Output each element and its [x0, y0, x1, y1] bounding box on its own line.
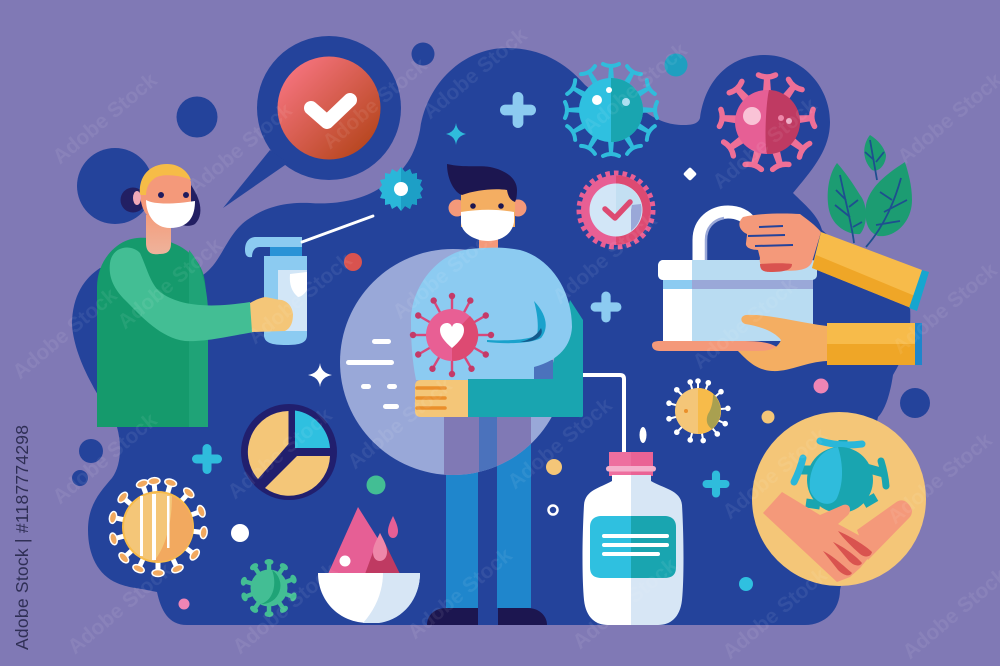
man with mask	[427, 164, 547, 625]
light blue plus	[591, 292, 621, 322]
watermarks: Adobe Stock	[403, 544, 517, 644]
decorative dot	[72, 470, 88, 486]
white diamond	[683, 167, 697, 181]
watermarks: Adobe Stock	[888, 259, 1000, 359]
decorative dot yellow	[762, 410, 774, 424]
small teal sparkle	[446, 123, 466, 145]
small yellow virus	[666, 378, 731, 444]
watermarks: Adobe Stock	[8, 284, 122, 384]
decorative ring dot	[548, 506, 558, 514]
teal gear virus	[379, 167, 423, 211]
watermarks: Adobe Stock	[708, 94, 822, 194]
shackle shade	[706, 218, 724, 260]
bowl with flames	[318, 507, 420, 623]
padlock box	[658, 260, 817, 341]
droplet	[640, 427, 646, 443]
white sparkle	[308, 363, 332, 387]
upper hand and sleeve	[739, 213, 929, 311]
decorative dot	[176, 96, 218, 138]
spray bottle	[245, 216, 373, 345]
pink virus	[719, 75, 815, 169]
watermarks: Adobe Stock	[388, 224, 502, 324]
padlock shackle	[699, 212, 750, 262]
watermarks: Adobe Stock	[548, 209, 662, 309]
watermarks: Adobe Stock	[688, 274, 802, 374]
large yellow virus	[108, 477, 208, 576]
watermarks: Adobe Stock	[318, 54, 432, 154]
decorative dot pink	[814, 378, 828, 394]
decorative dot	[900, 388, 930, 418]
watermarks: Adobe Stock	[718, 564, 832, 664]
blob: lobe left of woman	[77, 148, 153, 224]
decorative dot yellow	[546, 459, 562, 475]
decorative dot white	[231, 524, 249, 542]
watermarks: Adobe Stock	[223, 404, 337, 504]
yellow circle with virus and hand	[752, 412, 926, 586]
watermarks: Adobe Stock	[228, 559, 342, 659]
blue blob backdrop	[72, 48, 910, 625]
watermarks: Adobe Stock	[503, 394, 617, 494]
pie chart	[241, 404, 337, 500]
man's arm and hand	[415, 379, 583, 417]
legs through circle	[444, 417, 531, 477]
watermarks: Adobe Stock	[243, 249, 357, 349]
speech bubble with check mark	[223, 36, 401, 208]
green virus	[240, 559, 298, 617]
decorative dot pink	[178, 598, 190, 610]
light blue plus	[500, 92, 536, 128]
motion lines	[346, 339, 399, 409]
decorative dot green	[366, 476, 386, 494]
medicine bottle	[582, 452, 684, 625]
watermarks: Adobe Stock	[568, 554, 682, 654]
woman with mask	[97, 164, 254, 427]
watermarks: Adobe Stock	[183, 99, 297, 199]
decorative dot teal	[739, 577, 753, 591]
tube	[583, 375, 624, 452]
decorative dot teal	[664, 54, 688, 76]
decorative red dot	[344, 253, 362, 271]
woman's hand	[250, 297, 293, 332]
teal virus	[565, 64, 657, 156]
translucent circle	[340, 249, 566, 475]
watermarks: Adobe Stock	[48, 69, 162, 169]
watermarks: Adobe Stock	[718, 424, 832, 524]
watermarks: Adobe Stock	[883, 429, 997, 529]
teal plus	[192, 444, 222, 474]
decorative dot	[412, 42, 434, 66]
heart virus on chest	[410, 293, 494, 377]
teal plus	[702, 470, 730, 498]
watermarks: Adobe Stock	[578, 39, 692, 139]
watermarks: Adobe Stock	[63, 559, 177, 659]
gear badge with check	[579, 173, 653, 247]
watermarks: Adobe Stock	[418, 24, 532, 124]
watermarks: Adobe Stock	[48, 409, 162, 509]
decorative dot	[79, 439, 103, 463]
watermarks: Adobe Stock	[343, 374, 457, 474]
stock id text: Adobe Stock | #1187774298	[12, 425, 32, 650]
lower hand and sleeve	[652, 315, 922, 371]
leaves	[828, 135, 912, 247]
watermarks: Adobe Stock	[113, 234, 227, 334]
man's torso	[411, 248, 583, 417]
